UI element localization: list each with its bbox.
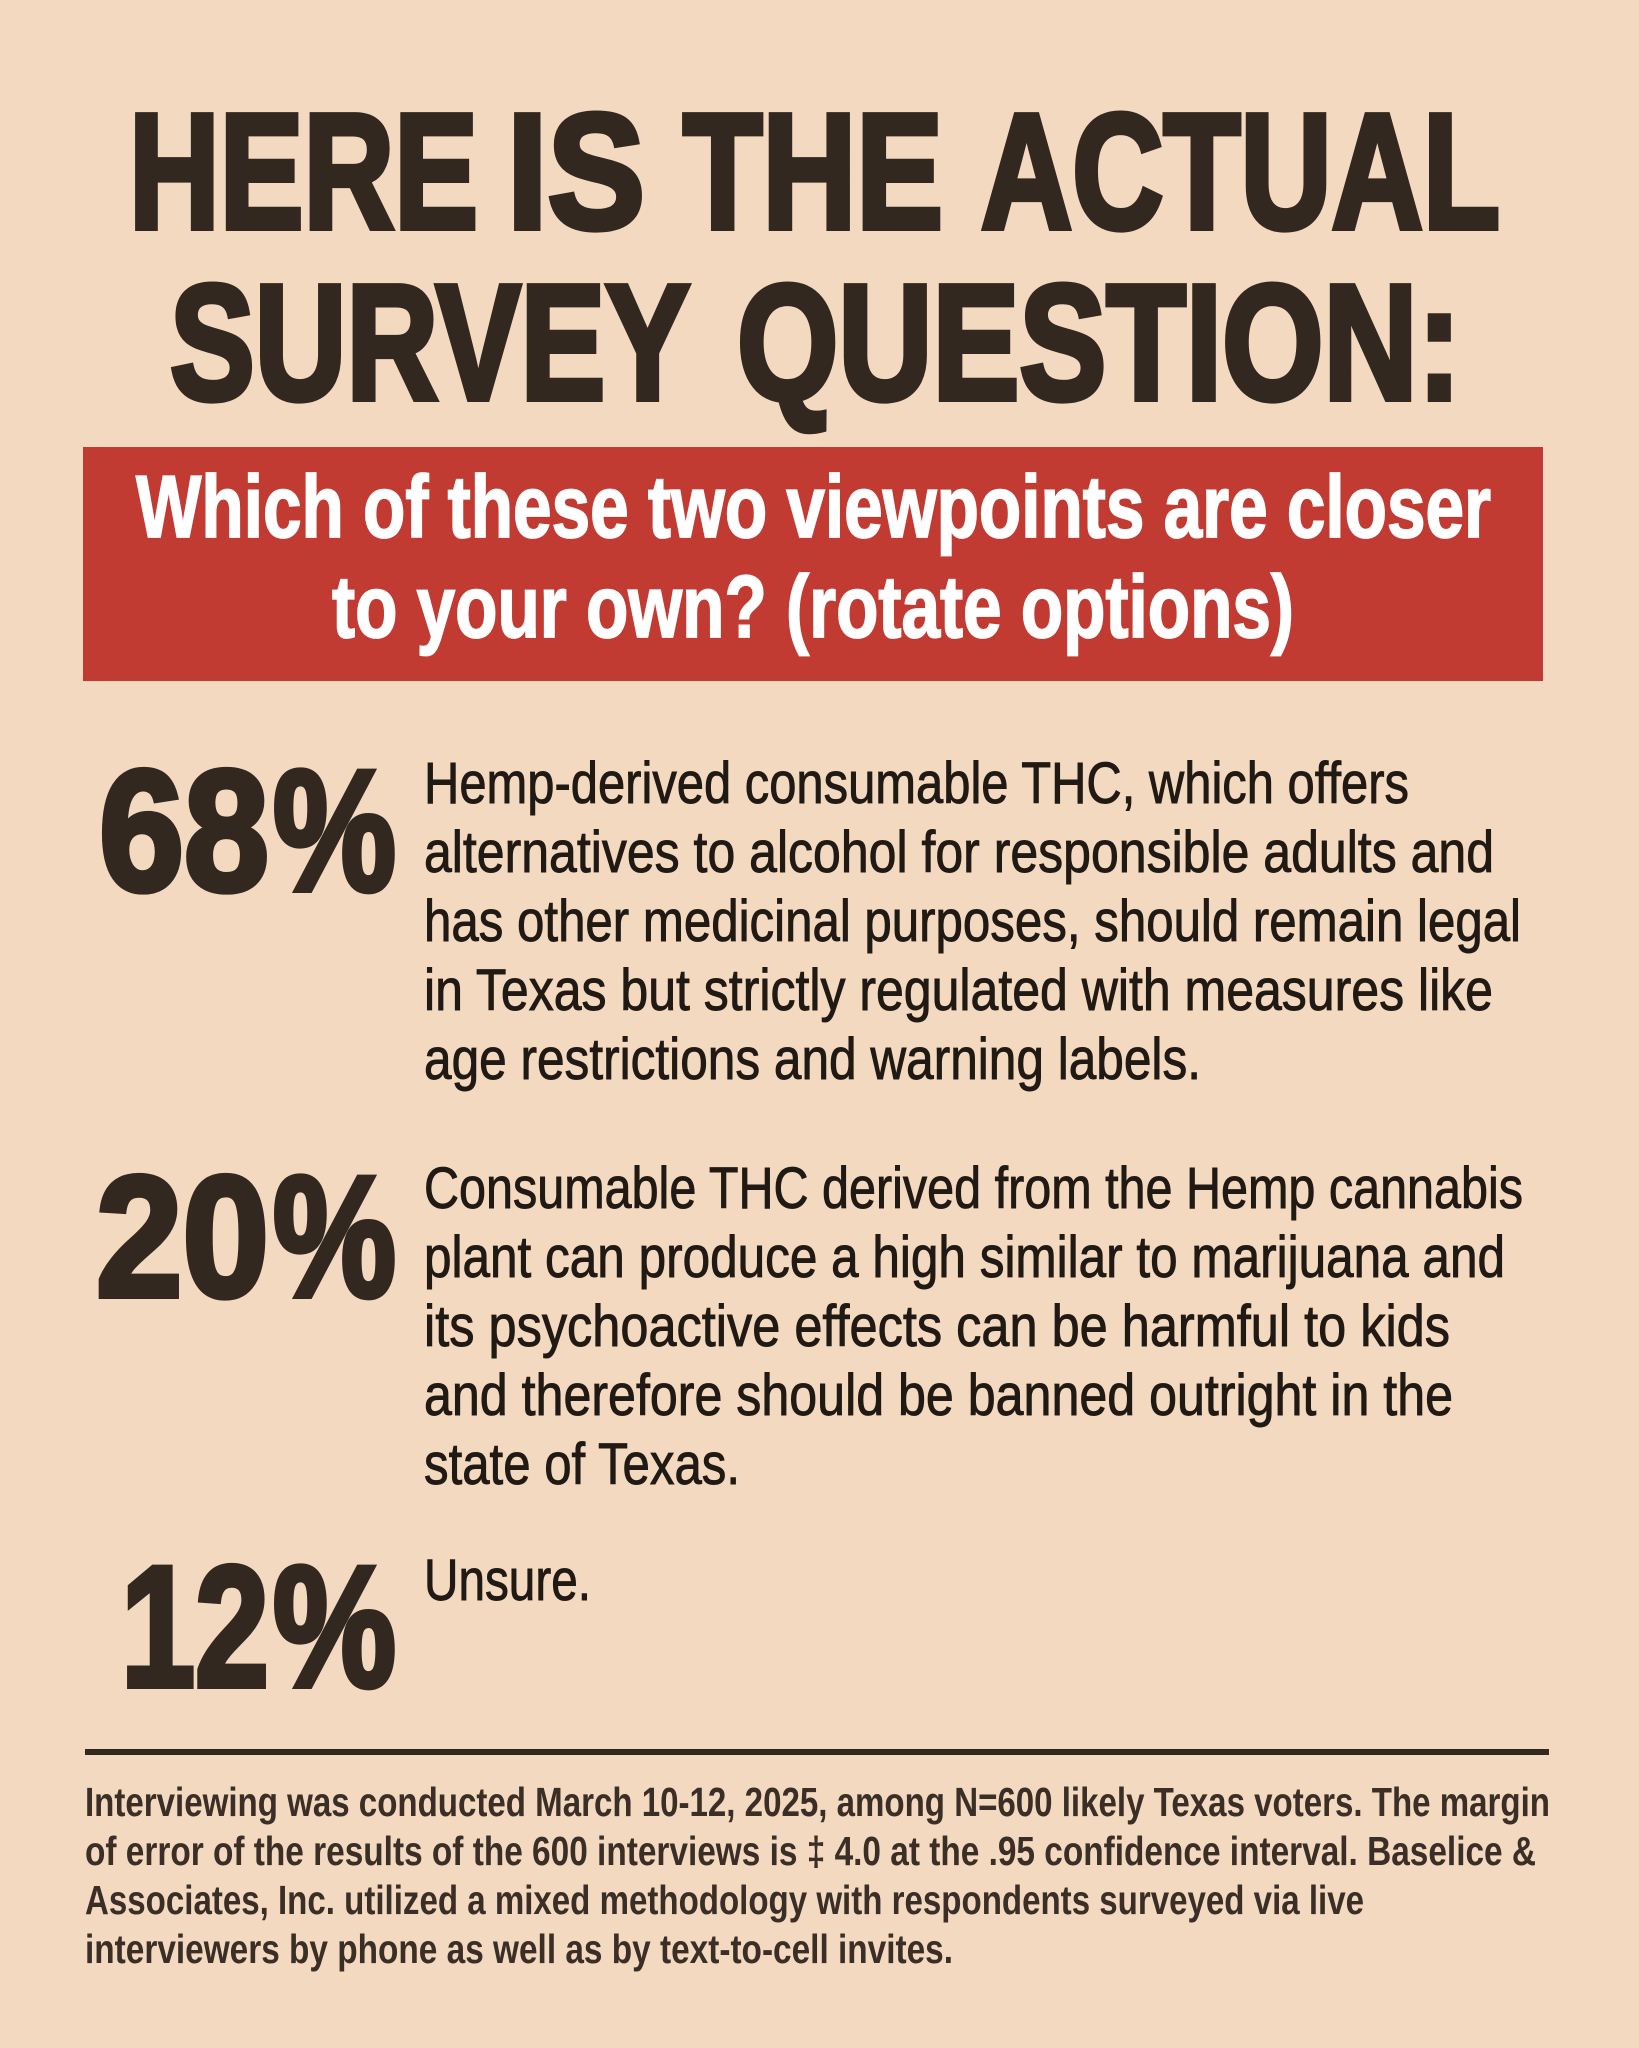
result: 12 percent: %	[273, 1531, 396, 1723]
result: 68 percent: Hemp-derived consumable THC, which offers	[424, 751, 1409, 816]
title: SURVEY	[170, 251, 690, 434]
result: 12 percent: 12	[121, 1531, 269, 1723]
title: ACTUAL	[981, 80, 1500, 263]
result: 68 percent: %	[273, 735, 396, 927]
result: 68 percent: 68	[99, 735, 269, 927]
footnote: methodology	[85, 1779, 1550, 1972]
title: IS	[507, 80, 645, 263]
result: 12 percent: Unsure.	[424, 1548, 591, 1613]
title: QUESTION:	[737, 251, 1461, 434]
result: 20 percent	[96, 1141, 1523, 1497]
footnote: methodology: Associates, Inc. utilized a mixed methodology with respondents surveyed via live	[85, 1877, 1364, 1923]
result: 20 percent: 20	[96, 1141, 269, 1333]
footnote: methodology: interviewers by phone as well as by text-to-cell invites.	[85, 1926, 953, 1972]
result: 20 percent: state of Texas.	[424, 1432, 740, 1497]
title: HERE	[129, 80, 478, 263]
result: 20 percent: its psychoactive effects can be harmful to kids	[424, 1294, 1450, 1359]
panel: survey question banner	[83, 447, 1543, 681]
result: 68 percent: in Texas but strictly regulated with measures like	[424, 958, 1493, 1023]
title: THE	[683, 80, 943, 263]
result: 12 percent	[121, 1531, 591, 1723]
title	[129, 80, 1500, 434]
result: 68 percent: age restrictions and warning labels.	[424, 1027, 1201, 1092]
panel: survey question banner: to your own? (rotate options)	[332, 557, 1294, 656]
result: 68 percent	[99, 735, 1521, 1092]
result: 68 percent: alternatives to alcohol for responsible adults and	[424, 820, 1494, 885]
result: 20 percent: %	[273, 1141, 396, 1333]
result: 20 percent: and therefore should be banned outright in the	[424, 1363, 1453, 1428]
